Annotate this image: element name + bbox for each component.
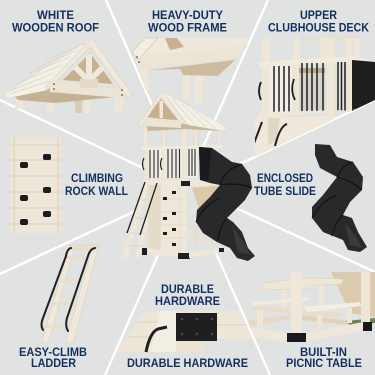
caption: durable hardware: DURABLE HARDWARE	[127, 356, 248, 370]
heading: upper clubhouse deck: UPPER	[300, 8, 337, 22]
panel: durable hardware	[117, 282, 252, 370]
central tube slide	[196, 147, 255, 261]
illustration: hardware bracket	[117, 311, 252, 352]
illustration: roof	[6, 38, 133, 113]
heading: white wooden roof	[12, 8, 99, 34]
panel: climbing rock wall	[10, 137, 128, 233]
illustration: slide	[312, 144, 367, 252]
heading: enclosed tube slide	[254, 171, 316, 198]
panel: easy-climb ladder	[19, 245, 99, 370]
central ladder	[122, 182, 161, 258]
heading: heavy-duty wood frame: HEAVY-DUTY	[152, 8, 223, 22]
heading: built-in picnic table: PICNIC TABLE	[286, 356, 362, 370]
heading: durable hardware: DURABLE	[161, 282, 214, 296]
panel: white wooden roof	[6, 8, 133, 113]
tower roof	[137, 91, 228, 131]
heading: durable hardware	[155, 282, 220, 308]
heading: climbing rock wall	[65, 171, 128, 198]
base frame	[142, 226, 233, 259]
heading: easy-climb ladder: EASY-CLIMB	[19, 345, 87, 359]
illustration: picnic table	[248, 272, 375, 342]
heading: easy-climb ladder	[19, 345, 87, 370]
heading: heavy-duty wood frame: WOOD FRAME	[148, 20, 227, 34]
illustration: deck	[253, 37, 375, 157]
heading: climbing rock wall: ROCK WALL	[65, 184, 128, 198]
heading: climbing rock wall: CLIMBING	[71, 171, 123, 185]
panel: upper clubhouse deck	[253, 8, 375, 157]
tower frame and deck	[142, 122, 222, 212]
panel: heavy-duty wood frame	[132, 8, 248, 104]
illustration: rock wall	[10, 137, 61, 233]
heading: heavy-duty wood frame	[148, 8, 227, 34]
heading: durable hardware: HARDWARE	[155, 294, 220, 308]
heading: white wooden roof: WHITE	[37, 8, 74, 22]
illustration: ladder	[42, 245, 99, 342]
heading: upper clubhouse deck	[268, 8, 369, 34]
heading: enclosed tube slide: ENCLOSED	[257, 171, 313, 185]
panel: central playset	[122, 91, 255, 261]
heading: built-in picnic table: BUILT-IN	[300, 345, 347, 359]
heading: built-in picnic table	[286, 345, 362, 370]
heading: white wooden roof: WOODEN ROOF	[12, 20, 99, 34]
rock wall tower side	[161, 187, 187, 253]
heading: enclosed tube slide: TUBE SLIDE	[254, 184, 316, 198]
heading: easy-climb ladder: LADDER	[31, 356, 76, 370]
panel: enclosed tube slide	[254, 144, 367, 252]
panel: built-in picnic table	[248, 272, 375, 370]
illustration: frame	[132, 38, 248, 104]
